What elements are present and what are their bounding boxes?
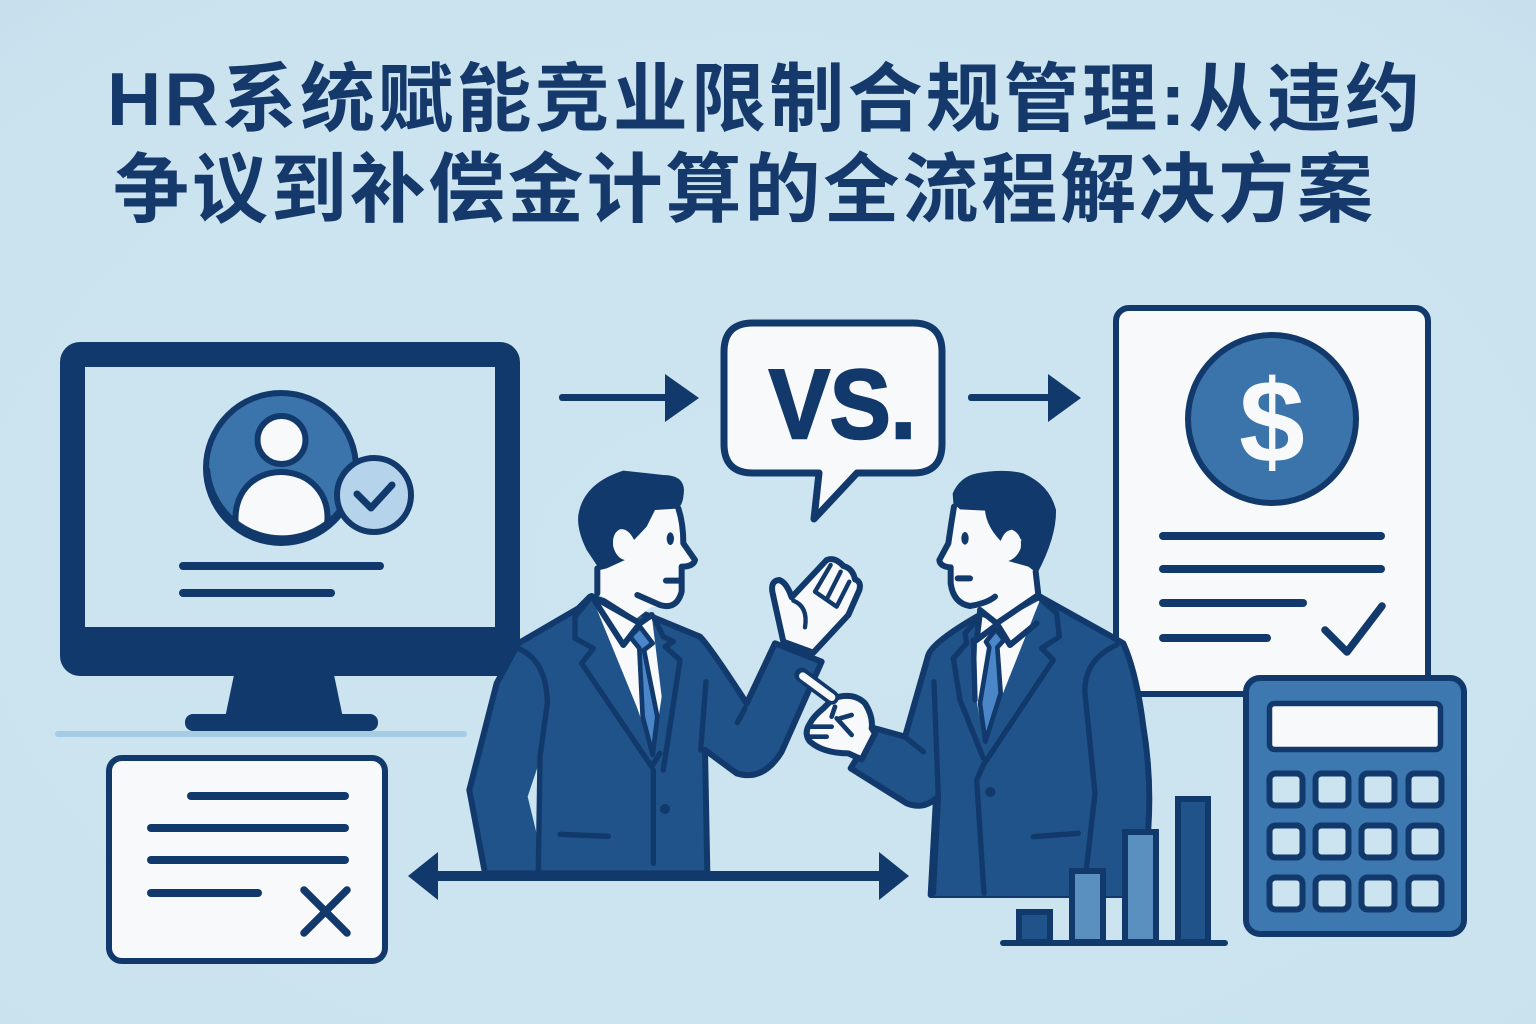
icon: calculator [1246, 678, 1464, 934]
button [985, 787, 995, 797]
figure: right businessman [802, 471, 1149, 896]
hair [953, 471, 1056, 573]
figure: left businessman [469, 471, 860, 873]
button [660, 804, 670, 814]
icon: dollar coin: $ [1239, 356, 1305, 488]
title: 争议到补偿金计算的全流程解决方案 [113, 148, 1373, 233]
tie [980, 629, 1004, 742]
ear [613, 529, 634, 560]
profile text lines [179, 562, 384, 597]
document text lines [1159, 532, 1385, 642]
eye [667, 532, 674, 545]
face and neck [597, 508, 695, 618]
icon: employee avatar [206, 393, 411, 543]
ear [1001, 530, 1021, 561]
mouth [666, 572, 678, 590]
panel: compensation document [1116, 308, 1428, 694]
speech bubble: VS.: VS. [769, 349, 916, 459]
icon: bar chart [1003, 799, 1225, 943]
mouth [958, 569, 970, 587]
speech bubble: VS. [724, 323, 942, 519]
title [107, 57, 1420, 233]
arrow: two-way dispute [408, 852, 909, 900]
hair [578, 471, 684, 570]
shirt [975, 600, 1040, 743]
icon: check mark [1325, 606, 1382, 652]
raised open hand [772, 559, 860, 653]
pointing hand [802, 675, 875, 759]
shirt [592, 597, 662, 753]
eye [961, 532, 969, 545]
jacket [851, 597, 1149, 895]
icon: computer monitor with employee profile [55, 342, 520, 737]
agreement text lines [147, 792, 349, 897]
face and neck [939, 507, 1038, 623]
tie [630, 627, 657, 755]
icon: dollar coin [1188, 335, 1356, 503]
icon: X mark [304, 890, 347, 933]
panel: breached agreement document [109, 758, 385, 961]
arrow: VS bubble to compensation document [968, 374, 1081, 422]
arrow: monitor to VS bubble [559, 374, 699, 422]
gap between arm and body [528, 762, 539, 837]
jacket [469, 597, 822, 873]
lapels [907, 598, 1117, 893]
lapels [513, 598, 745, 870]
title: HR系统赋能竞业限制合规管理:从违约 [107, 57, 1420, 141]
